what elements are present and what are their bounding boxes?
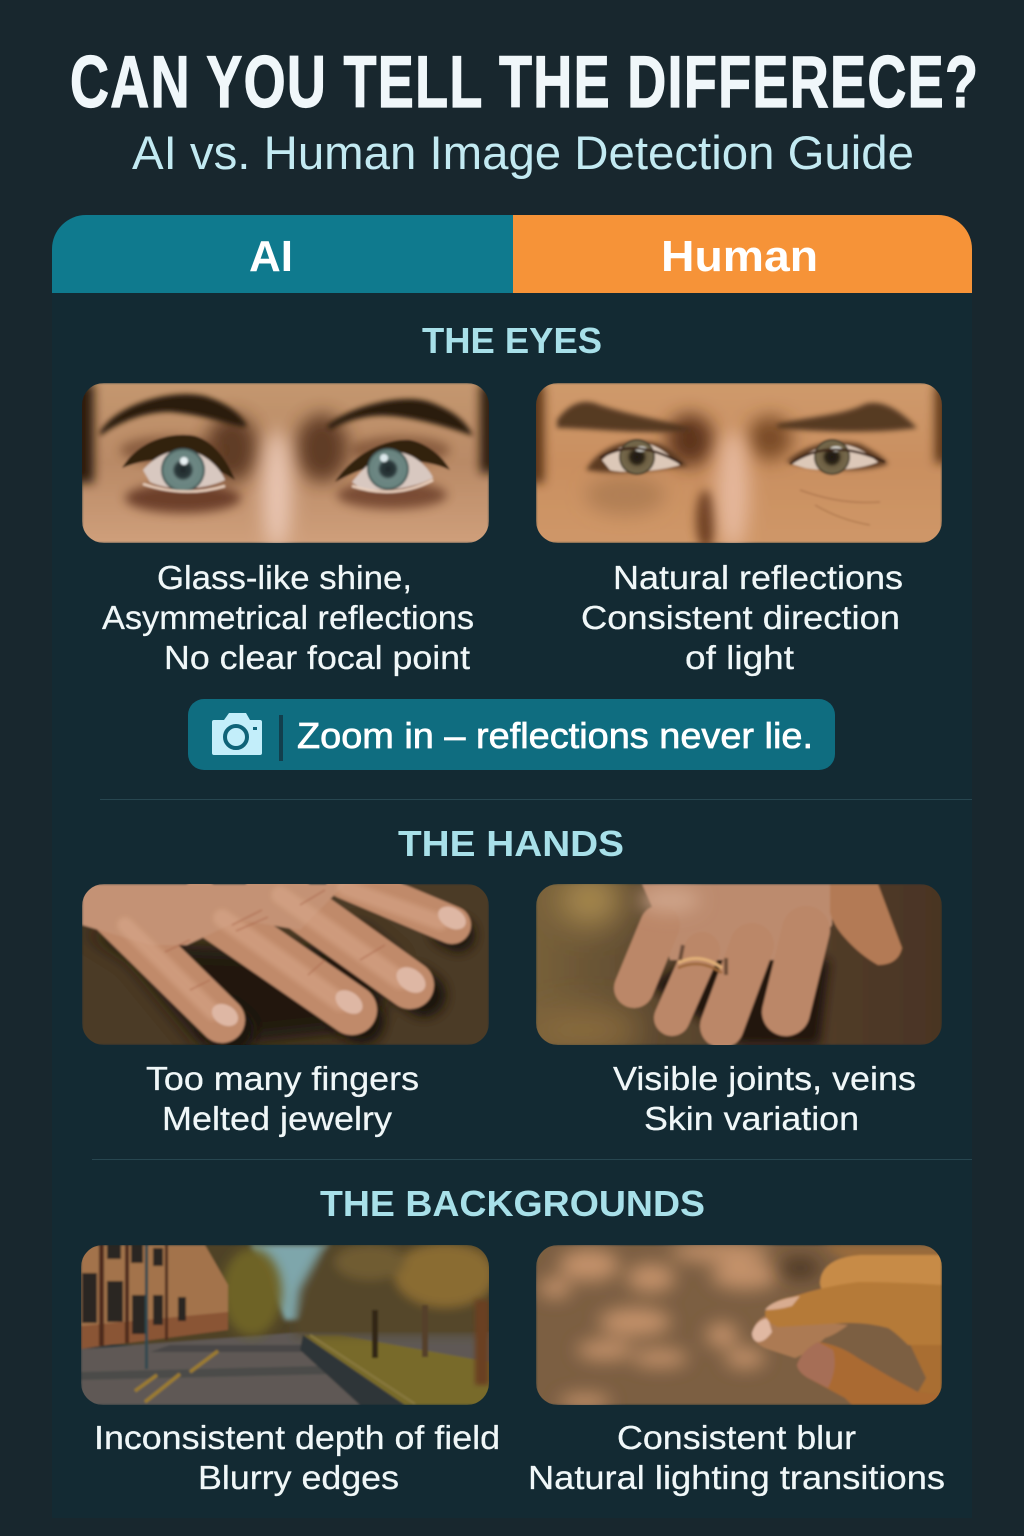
header: AI [52,215,513,293]
AI hands caption [146,1060,419,1137]
AI backgrounds caption: Blurry edges [198,1459,399,1496]
callout: zoom tip: Zoom in – reflections never lie. [297,715,813,756]
column header [52,215,972,293]
header: Human [513,215,972,293]
human eyes caption: Natural reflections [613,559,903,596]
human eyes caption: of light [685,639,794,676]
photo: human fingers on blurred ground [536,1242,942,1410]
header: Human: Human [661,232,818,281]
AI hands caption: Too many fingers [146,1060,419,1097]
icon: camera [212,713,262,755]
section heading: the backgrounds: THE BACKGROUNDS [320,1183,705,1224]
callout: zoom tip [188,699,835,770]
AI eyes caption [102,559,474,676]
header: AI: AI [249,232,293,281]
photo: AI hand [82,880,489,1045]
photo: human hand [530,874,942,1050]
photo: AI street [81,1243,495,1405]
section heading: the eyes: THE EYES [422,320,602,361]
AI eyes caption: Asymmetrical reflections [102,599,474,636]
section heading: the hands: THE HANDS [398,823,624,864]
human backgrounds caption [528,1419,945,1496]
human backgrounds caption: Natural lighting transitions [528,1459,945,1496]
human eyes caption: Consistent direction [581,599,900,636]
human hands caption: Visible joints, veins [613,1060,916,1097]
AI eyes caption: No clear focal point [164,639,470,676]
subtitle: AI vs. Human Image Detection Guide [132,126,914,179]
human hands caption [613,1060,916,1137]
photo: human eyes [528,383,949,550]
photo: AI eyes [70,383,498,550]
human hands caption: Skin variation [644,1100,859,1137]
title: CAN YOU TELL THE DIFFERECE? [70,41,978,123]
AI eyes caption: Glass-like shine, [157,559,412,596]
AI backgrounds caption [94,1419,500,1496]
AI backgrounds caption: Inconsistent depth of field [94,1419,500,1456]
human backgrounds caption: Consistent blur [617,1419,856,1456]
AI hands caption: Melted jewelry [162,1100,393,1137]
human eyes caption [581,559,903,676]
comparison panel [52,293,972,1518]
